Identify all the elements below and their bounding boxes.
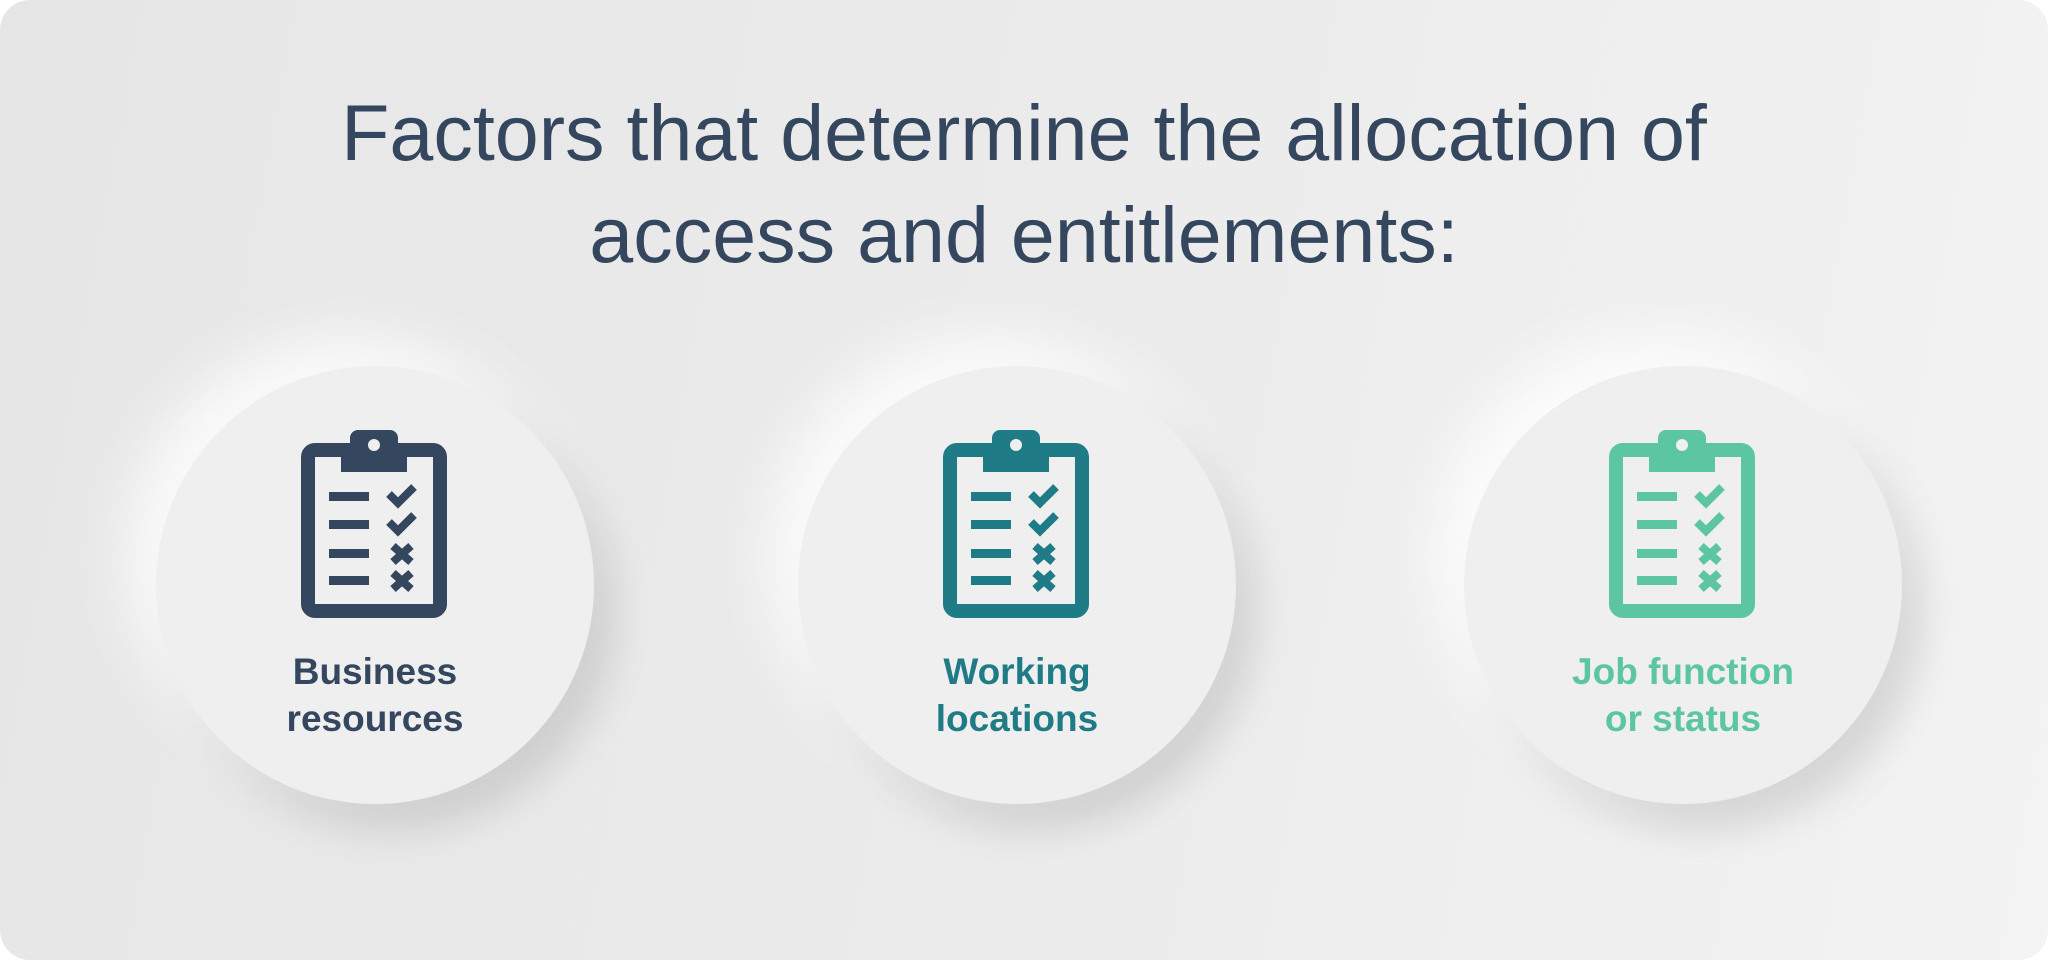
label: job function: Job function: [1572, 651, 1794, 692]
panel: job function: [1464, 366, 1902, 804]
icon: clipboard dark: [308, 430, 440, 611]
title: access and entitlements:: [589, 190, 1459, 279]
label: working locations: [936, 651, 1098, 739]
label: working locations: Working: [943, 651, 1091, 692]
label: business resources: [287, 651, 463, 739]
label: job function: or status: [1605, 698, 1761, 739]
icon: clipboard teal: [950, 430, 1082, 611]
label: business resources: Business: [293, 651, 457, 692]
title: [341, 88, 1707, 279]
title: Factors that determine the allocation of: [341, 88, 1707, 177]
icon: clipboard green: [1616, 430, 1748, 611]
panel: business resources: [156, 366, 594, 804]
label: working locations: locations: [936, 698, 1098, 739]
label: business resources: resources: [287, 698, 463, 739]
panel: working locations: [798, 366, 1236, 804]
label: job function: [1572, 651, 1794, 739]
